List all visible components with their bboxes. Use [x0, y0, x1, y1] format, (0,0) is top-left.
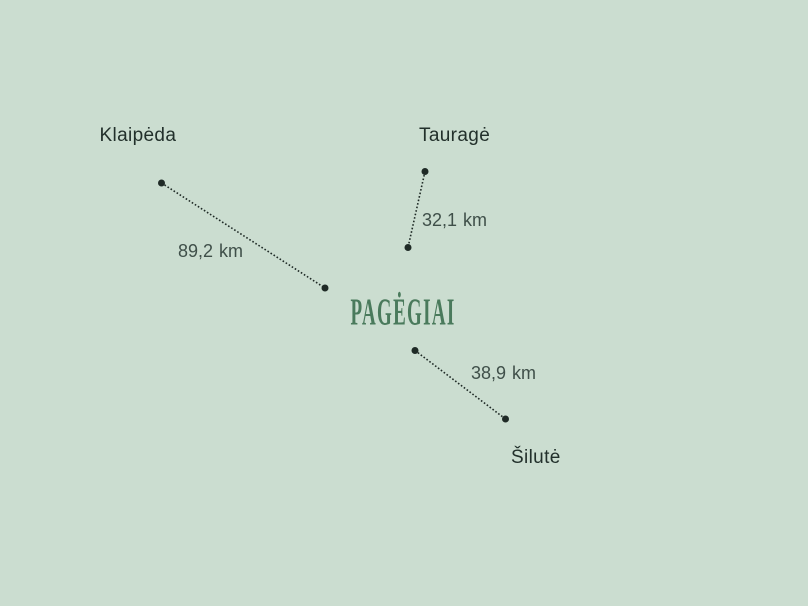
label: Šilutė: Šilutė — [511, 446, 561, 468]
label: Klaipėda: Klaipėda — [100, 125, 176, 146]
title: Pagėgiai: PAGĖGIAI — [350, 292, 456, 333]
distance: 89,2 km: 89,2 km — [178, 241, 243, 261]
label: Tauragė: Tauragė — [419, 125, 490, 146]
route: Šilutė to Pagėgiai — [412, 347, 509, 422]
distance: 32,1 km: 32,1 km — [422, 210, 487, 230]
route: Tauragė to Pagėgiai — [404, 168, 428, 251]
route: Klaipėda to Pagėgiai — [158, 180, 328, 292]
distance: 38,9 km: 38,9 km — [471, 363, 536, 383]
